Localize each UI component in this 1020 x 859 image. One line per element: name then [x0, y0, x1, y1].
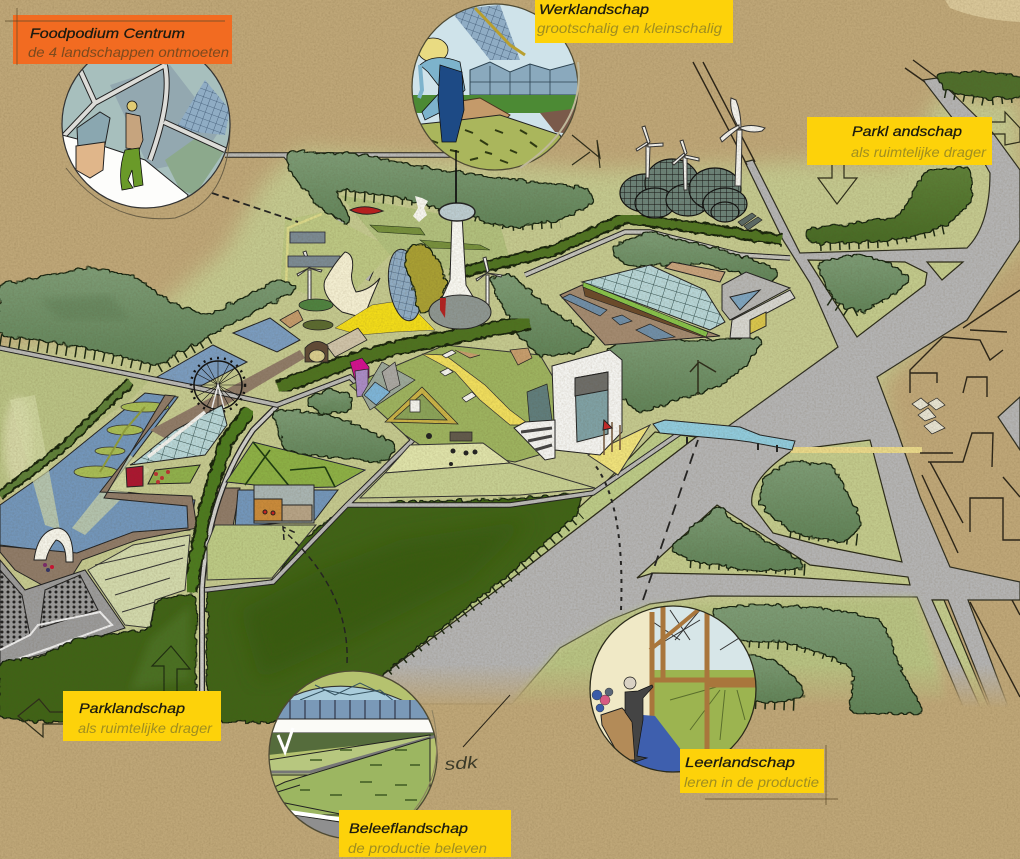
hedge: left lake fill — [0, 382, 130, 495]
faces — [309, 350, 325, 362]
hedge: lower curved fill — [190, 410, 250, 592]
glass roof — [582, 265, 725, 330]
lake: main water — [0, 393, 195, 555]
label: Foodpodium Centrum: Foodpodium Centrum — [30, 25, 185, 41]
hedge: lower curved — [190, 410, 250, 592]
island: between branches — [932, 600, 996, 725]
road: east fragment — [998, 397, 1020, 450]
grey dome at tower base — [429, 295, 491, 329]
grey block — [382, 362, 400, 392]
dashed leader lines — [212, 193, 698, 663]
label: Beleeflandschap: Beleeflandschap — [349, 820, 468, 836]
tower ring — [439, 203, 475, 221]
tree: north belt — [287, 152, 593, 227]
lens outer pencil arc — [66, 120, 230, 219]
arrow: park up — [152, 646, 190, 695]
central big dark forest — [207, 494, 582, 722]
lens: Beleeflandschap — [268, 670, 440, 840]
visitor — [121, 101, 143, 190]
west waterfront buildings — [280, 299, 367, 362]
yellow plaza — [335, 300, 435, 335]
label: Beleeflandschap: de productie beleven — [348, 840, 487, 856]
label: Leerlandschap — [680, 745, 838, 805]
white band — [268, 719, 440, 733]
red kiosk — [126, 466, 143, 487]
label: Beleeflandschap — [339, 810, 511, 857]
island: north triangle — [927, 262, 963, 280]
north campus structures — [288, 196, 428, 267]
soil — [540, 108, 574, 133]
fade: roads dissolving into paper — [380, 664, 1020, 708]
lens: Leerlandschap — [590, 605, 760, 775]
small parkland tree — [745, 655, 808, 705]
west fields on north side — [280, 212, 395, 305]
ferris wheel — [191, 358, 245, 412]
flower bed — [148, 465, 200, 484]
timber huts — [280, 310, 303, 328]
floor — [63, 134, 188, 208]
timber pergola — [665, 262, 725, 282]
glass wall — [278, 700, 428, 718]
visitor centre — [722, 272, 795, 338]
lens rim — [590, 606, 756, 772]
purple block — [355, 369, 368, 397]
label: Werklandschap: Werklandschap — [539, 1, 649, 17]
waterfront greenhouse — [126, 405, 227, 487]
dark gate — [305, 341, 328, 362]
label: Parklandschap south-west: als ruimtelijke drager — [78, 720, 213, 736]
lake: bright light beams — [10, 395, 150, 535]
turbine: middle — [672, 140, 699, 190]
red pond — [350, 207, 383, 214]
hedge: north fill — [450, 218, 782, 275]
thin approach lines north — [693, 60, 940, 165]
lectern — [601, 708, 635, 760]
sheds — [288, 232, 340, 267]
timber and white pieces — [410, 350, 476, 412]
red sail — [440, 298, 446, 318]
audience — [592, 688, 613, 712]
leader: beleef to pond — [283, 527, 347, 663]
island: diagonal strip — [380, 432, 696, 677]
quay: diagonal boardwalk — [150, 350, 305, 440]
lens: Werklandschap — [410, 0, 582, 203]
island: long triangle — [637, 505, 910, 585]
gate opening — [575, 372, 608, 442]
turbine: campus north — [297, 251, 322, 300]
tree: greenhouse rear — [612, 233, 778, 282]
field: central campus — [350, 345, 590, 462]
hedge: central diagonal fill — [278, 322, 530, 388]
quay: brown promenade — [0, 395, 197, 595]
leader: leer to gate dotted — [595, 465, 621, 610]
frame timbers — [650, 607, 756, 749]
plaza: yellow forecourt of gate — [588, 425, 650, 475]
lens: Foodpodium centrum — [61, 64, 231, 220]
small pavilions on eastern plot — [912, 398, 945, 434]
magenta tower — [350, 358, 369, 380]
stack garden — [299, 299, 333, 311]
mast line — [455, 150, 457, 203]
field: lower meadow — [360, 463, 595, 498]
tree: east of hedge — [490, 275, 597, 355]
crop heap — [421, 114, 561, 170]
quay: central east block — [213, 488, 240, 532]
yellow garden path — [422, 354, 530, 425]
leader: leer to bridge — [643, 440, 698, 600]
field dark — [268, 733, 440, 755]
small timber — [455, 348, 532, 365]
path: grey service lanes — [0, 155, 680, 590]
label: Leerlandschap: leren in de productie — [684, 774, 819, 790]
arrow: park north-east down — [818, 154, 857, 204]
blue block — [364, 382, 390, 405]
forecourt — [560, 285, 720, 345]
arrow: werk — [572, 135, 600, 168]
flags — [604, 420, 620, 455]
lens rim — [269, 671, 437, 839]
label: Werklandschap — [535, 0, 733, 43]
organic white pavilion — [324, 252, 380, 318]
arrow: tree up — [690, 360, 716, 395]
field — [654, 670, 756, 749]
island: lens — [752, 440, 902, 562]
yellow-green foliage — [406, 243, 446, 315]
roads: main grey road network — [382, 78, 1020, 728]
facade with green strip — [583, 282, 712, 340]
arrows — [18, 112, 1020, 737]
display case — [77, 112, 110, 148]
hedge: north — [450, 218, 782, 275]
white sculpture — [413, 196, 428, 222]
tree: lens island — [760, 462, 862, 540]
stage: white canopy — [34, 528, 73, 572]
maze: eastern plot outlines — [910, 290, 1020, 697]
label: Parklandschap north-east: Parkl andschap — [852, 123, 962, 139]
tree: north-east corner — [936, 72, 1020, 100]
field: pale meadow — [385, 443, 510, 473]
greenhouses — [470, 62, 580, 95]
lens scene — [62, 64, 230, 208]
hedge: left lake — [0, 382, 130, 495]
pond: basin with building — [235, 490, 338, 527]
tree: upper right parkland — [808, 168, 972, 245]
tower mast — [455, 168, 457, 203]
reflecting pools — [562, 294, 675, 340]
restaurant — [326, 328, 367, 357]
label: Foodpodium Centrum — [5, 8, 232, 65]
grazing animals — [426, 433, 478, 466]
leader: centrum circle to plan — [212, 193, 298, 222]
terraces: striped field — [88, 535, 190, 628]
window — [650, 606, 753, 670]
west forest bank — [0, 595, 195, 722]
tree: small cluster — [305, 390, 352, 413]
speaker — [624, 677, 653, 762]
dome — [450, 5, 520, 60]
turbine: large — [720, 98, 765, 186]
tree: long triangle — [670, 505, 810, 570]
triangle garden — [385, 387, 458, 424]
tree: south of greenhouse — [607, 335, 765, 412]
tower — [439, 168, 475, 300]
blue carpet — [632, 715, 680, 772]
market shed — [450, 432, 472, 441]
tower shaft — [441, 215, 475, 300]
gate frame — [552, 350, 622, 455]
field: allotments — [226, 442, 365, 488]
arrow: park left — [18, 699, 68, 737]
greenhouse complex — [560, 262, 795, 345]
lens outer arc — [520, 62, 579, 168]
block base — [362, 362, 415, 410]
left meadow glow — [0, 350, 150, 490]
tree: west hill — [0, 268, 300, 368]
campus grounds — [207, 195, 595, 580]
label: Leerlandschap: Leerlandschap — [685, 754, 795, 770]
domes: glass cluster — [620, 159, 747, 222]
ground: light green site — [0, 95, 1020, 700]
farmer — [418, 38, 465, 142]
path: lane near greenhouse — [525, 232, 790, 275]
globe greenhouse — [384, 247, 426, 323]
plants — [300, 750, 420, 800]
kiosk — [527, 384, 552, 428]
traffic islands — [380, 260, 996, 725]
lower path — [278, 784, 339, 816]
path: white lane along hedge — [202, 406, 277, 692]
white Y stake — [278, 728, 293, 752]
label: Parklandschap north-east: als ruimtelijke drager — [851, 144, 987, 160]
hedge line — [410, 95, 582, 113]
label: Parklandschap south-west — [63, 691, 221, 741]
hedge: central diagonal — [278, 322, 530, 388]
window frames — [60, 65, 225, 160]
trees: central group — [0, 152, 782, 592]
turbine: near tower — [476, 257, 502, 305]
label: Parklandschap north-east — [807, 117, 992, 165]
lens rim — [412, 4, 578, 170]
signature: sdk — [444, 753, 480, 774]
rows — [268, 735, 430, 775]
bridge — [653, 420, 795, 452]
label: Foodpodium Centrum: de 4 landschappen ontmoeten — [28, 44, 229, 60]
island: north-east parkland — [808, 260, 927, 337]
lake: northern basins — [157, 318, 300, 390]
signature line — [463, 695, 510, 747]
wind turbines — [297, 98, 765, 305]
field: lower green — [207, 525, 316, 580]
tree: triangle island — [817, 255, 912, 313]
lily pads — [74, 402, 169, 478]
monumental gate — [514, 350, 622, 460]
building: waterfront — [254, 485, 314, 523]
strip: pale yellow — [790, 447, 922, 453]
arrow: park right — [980, 112, 1020, 145]
glass roof — [290, 686, 402, 700]
turbine: left — [636, 126, 663, 178]
trees: east parkland — [670, 72, 1020, 570]
logs — [462, 98, 511, 120]
lower parkland tree — [712, 605, 925, 713]
tree: campus west — [272, 410, 397, 462]
lower right field — [510, 598, 945, 705]
solar panels — [738, 213, 762, 230]
lens outer arc — [400, 710, 437, 825]
label: Werklandschap: grootschalig en kleinschalig — [537, 20, 722, 36]
pale strips north — [340, 195, 510, 275]
label: Parklandschap south-west: Parklandschap — [79, 700, 185, 716]
stairs — [514, 420, 555, 460]
lens rim — [62, 40, 230, 208]
amphitheatre: seating — [0, 560, 125, 665]
central cluster — [350, 348, 552, 441]
